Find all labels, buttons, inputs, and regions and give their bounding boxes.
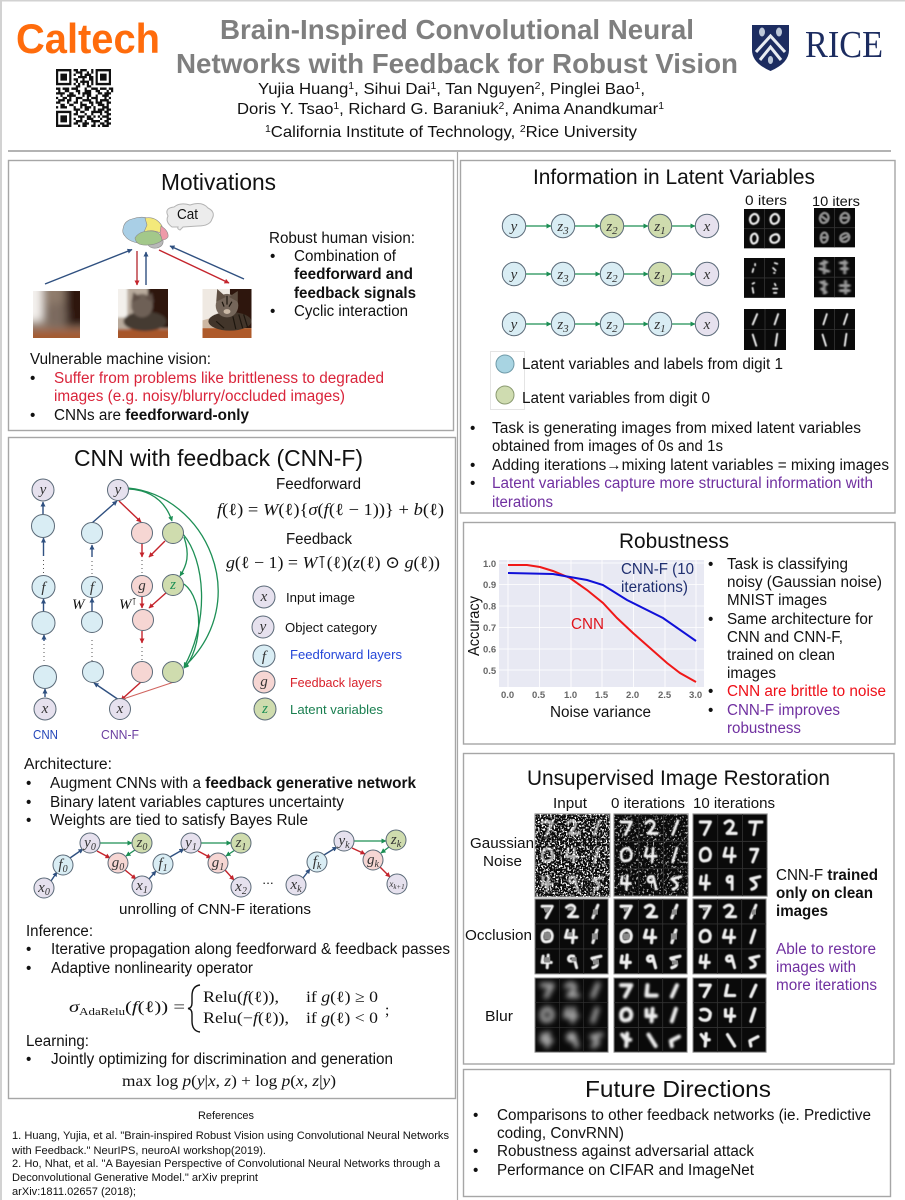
diagram: unrolling of CNN-F iterations: 1 bbox=[163, 863, 168, 874]
text: future work list: Comparisons to other feedback networks (ie. Predictive bbox=[497, 1107, 871, 1124]
line chart: accuracy vs noise variance: 0.7 bbox=[483, 623, 496, 634]
text: vulnerable machine vision: Vulnerable machine vision: bbox=[30, 351, 211, 368]
line chart: accuracy vs noise variance: Noise variance bbox=[550, 704, 651, 721]
equation: AdaRelu: Relu(− f(ℓ)), bbox=[203, 1010, 289, 1027]
references: 1. Huang, Yujia, et al. "Brain-inspired Robust Vision using Convolutional Neural Networks bbox=[12, 1130, 449, 1142]
references: arXiv:1811.02657 (2018); bbox=[12, 1186, 136, 1198]
text: robust human vision: • bbox=[270, 248, 275, 265]
row labels: Gaussian bbox=[470, 836, 534, 852]
row labels: Blur bbox=[485, 1009, 513, 1025]
line chart: accuracy vs noise variance bbox=[466, 559, 704, 721]
authors and affiliations: 1 bbox=[658, 101, 664, 112]
text: robustness findings: MNIST images bbox=[727, 592, 827, 609]
text: robust human vision: Cyclic interaction bbox=[294, 303, 408, 320]
text: architecture: Binary latent variables captures uncertainty bbox=[50, 794, 344, 811]
diagram: unrolling of CNN-F iterations: x bbox=[290, 877, 297, 893]
heading: information in latent variables: Information in Latent Variables bbox=[533, 164, 815, 189]
legend: node types: Feedback layers bbox=[290, 675, 382, 690]
text: vulnerable machine vision: • bbox=[30, 370, 35, 387]
text: able to restore images: Able to restore bbox=[776, 941, 876, 958]
equation: feedback bbox=[226, 531, 440, 572]
text: able to restore images: images with bbox=[776, 959, 856, 976]
diagram: latent variable chains: z bbox=[654, 317, 660, 333]
text: architecture: • bbox=[26, 812, 31, 829]
equation: AdaRelu: ; bbox=[385, 1002, 389, 1019]
image grid: gaussian noise row bbox=[535, 814, 767, 897]
references: Deconvolutional Generative Model." arXiv preprint bbox=[12, 1172, 258, 1184]
text: robust human vision: feedback signals bbox=[294, 285, 416, 302]
heading: motivations: Motivations bbox=[161, 169, 276, 195]
line chart: accuracy vs noise variance: 2.5 bbox=[658, 690, 672, 701]
diagram: latent variable chains: 3 bbox=[562, 273, 569, 285]
equation: AdaRelu: Relu( f(ℓ)), bbox=[203, 989, 279, 1006]
diagram: CNN-F: ⊺ bbox=[132, 597, 137, 608]
logo: Rice bbox=[752, 24, 883, 71]
logo: Rice: RICE bbox=[805, 24, 883, 66]
image grids: digits at 0 and 10 iterations bbox=[744, 192, 860, 350]
label: CNN: CNN bbox=[33, 727, 58, 742]
diagram: CNN-F: x bbox=[116, 701, 124, 717]
references bbox=[11, 1110, 449, 1198]
diagram: latent variable chains: z bbox=[654, 219, 660, 235]
diagram: unrolling of CNN-F iterations: k bbox=[397, 839, 402, 850]
diagram: unrolling of CNN-F iterations: k bbox=[375, 859, 380, 870]
text: vulnerable machine vision: images (e.g. noisy/blurry/occluded images) bbox=[54, 388, 345, 405]
diagram: CNN: y bbox=[38, 482, 47, 498]
diagram: unrolling of CNN-F iterations: 1 bbox=[192, 842, 197, 853]
equation: AdaRelu bbox=[69, 985, 389, 1032]
authors and affiliations: California Institute of Technology, bbox=[271, 124, 520, 141]
diagram: latent variable chains: 2 bbox=[612, 323, 618, 335]
authors and affiliations: Yujia Huang bbox=[258, 81, 344, 98]
text: learning: max log p(y|x, z) + log p(x, z|y) bbox=[122, 1073, 336, 1090]
legend: node types bbox=[252, 586, 402, 720]
row labels: Noise bbox=[483, 854, 522, 870]
logo: Caltech: Caltech bbox=[16, 15, 160, 62]
diagram: latent variable chains: z bbox=[557, 219, 563, 235]
authors and affiliations: 2 bbox=[535, 81, 541, 92]
text: architecture: Augment CNNs with a feedback generative network bbox=[50, 775, 416, 792]
diagram: CNN-F: y bbox=[113, 482, 122, 498]
text: robustness findings: trained on clean bbox=[727, 647, 835, 664]
text: trained only on clean images bbox=[776, 867, 878, 920]
line chart: accuracy vs noise variance: 1.0 bbox=[483, 559, 496, 570]
diagram: unrolling of CNN-F iterations: y bbox=[185, 835, 192, 851]
diagram: latent variable chains: z bbox=[654, 267, 660, 283]
text: future work list bbox=[473, 1107, 871, 1179]
text: architecture: Architecture: bbox=[24, 756, 112, 773]
QR code bbox=[56, 69, 113, 127]
diagram: unrolling of CNN-F iterations: k bbox=[297, 884, 302, 895]
text: latent variable findings: • bbox=[470, 420, 475, 437]
diagram: latent variable chains: z bbox=[606, 317, 612, 333]
diagram: CNN-F: g bbox=[138, 578, 146, 594]
text: vulnerable machine vision bbox=[30, 351, 384, 424]
equation: feedback: Feedback bbox=[286, 531, 352, 548]
row labels bbox=[465, 836, 534, 1025]
diagram: latent variable chains: 1 bbox=[660, 273, 666, 285]
text: learning: • bbox=[26, 1051, 31, 1068]
diagram: CNN-F: W bbox=[72, 597, 86, 613]
icon: thought cloud with Cat bbox=[167, 204, 213, 230]
text: robustness findings bbox=[708, 556, 886, 737]
image: heavily blurred cat bbox=[33, 291, 80, 338]
diagram: latent variable chains: y bbox=[509, 317, 518, 333]
legend: digit colours: Latent variables from digit 0 bbox=[522, 390, 710, 407]
diagram: unrolling of CNN-F iterations: z bbox=[236, 835, 241, 851]
diagram: unrolling of CNN-F iterations: 0 bbox=[91, 842, 96, 853]
column labels: 0 iterations bbox=[611, 796, 685, 812]
column labels: 10 iterations bbox=[693, 796, 775, 812]
diagram: unrolling of CNN-F iterations: k bbox=[345, 840, 350, 851]
line chart: accuracy vs noise variance: CNN bbox=[571, 616, 604, 633]
header bbox=[16, 14, 883, 141]
text: robust human vision: feedforward and bbox=[294, 266, 413, 283]
text: architecture: Weights are tied to satisfy Bayes Rule bbox=[50, 812, 308, 829]
equation: feedback: g(ℓ − 1) = W⊺(ℓ)(z(ℓ) ⊙ g(ℓ)) bbox=[226, 553, 440, 572]
equation: AdaRelu: σ bbox=[69, 999, 81, 1016]
image: sharp cat bbox=[202, 289, 252, 338]
curve: CNN bbox=[508, 565, 696, 682]
diagram: latent variable chains: x bbox=[703, 219, 711, 235]
text: robustness findings: • bbox=[708, 702, 713, 719]
text: learning: Jointly optimizing for discrimination and generation bbox=[51, 1051, 393, 1068]
text: learning: Learning: bbox=[26, 1033, 89, 1050]
diagram: unrolling of CNN-F iterations: f bbox=[313, 854, 317, 870]
line chart: accuracy vs noise variance: CNN-F (10 bbox=[621, 561, 694, 578]
curve: CNN-F bbox=[508, 573, 696, 641]
diagram: unrolling of CNN-F iterations: g bbox=[367, 852, 375, 868]
diagram: unrolling of CNN-F iterations: 0 bbox=[119, 862, 124, 873]
authors and affiliations: , Richard G. Baraniuk bbox=[339, 101, 500, 118]
text: inference: Adaptive nonlinearity operator bbox=[51, 960, 253, 977]
text: robustness findings: Same architecture for bbox=[727, 611, 873, 628]
heading: future directions: Future Directions bbox=[585, 1076, 771, 1102]
text: robust human vision: Combination of bbox=[294, 248, 397, 265]
line chart: accuracy vs noise variance: 1.5 bbox=[595, 690, 609, 701]
text: learning bbox=[26, 1033, 393, 1090]
text: inference: • bbox=[26, 941, 31, 958]
authors and affiliations: , Tan Nguyen bbox=[436, 81, 535, 98]
text: robustness findings: robustness bbox=[727, 720, 801, 737]
legend: digit colours bbox=[490, 352, 783, 410]
text: latent variable findings: • bbox=[470, 475, 475, 492]
text: latent variable findings: • bbox=[470, 457, 475, 474]
authors and affiliations: , Pinglei Bao bbox=[540, 81, 635, 98]
diagram: CNN-F: f bbox=[90, 580, 96, 596]
text: inference: • bbox=[26, 960, 31, 977]
diagram: CNN-F bbox=[72, 480, 218, 742]
equation: AdaRelu: AdaRelu bbox=[79, 1007, 125, 1018]
text: robustness findings: CNN-F improves bbox=[727, 702, 840, 719]
diagram: latent variable chains: y bbox=[509, 267, 518, 283]
diagram: unrolling of CNN-F iterations: f bbox=[58, 857, 63, 873]
diagram: unrolling of CNN-F iterations: ··· bbox=[262, 875, 274, 890]
title: Networks with Feedback for Robust Vision bbox=[176, 48, 738, 79]
title bbox=[176, 14, 738, 79]
line chart: accuracy vs noise variance: Accuracy bbox=[466, 596, 483, 656]
diagram: unrolling of CNN-F iterations: k bbox=[317, 861, 322, 872]
image grids: digits at 0 and 10 iterations: 0 iters bbox=[745, 192, 787, 208]
diagram: unrolling of CNN-F iterations: 1 bbox=[241, 842, 246, 853]
diagram: latent variable chains: 3 bbox=[562, 323, 569, 335]
text: future work list: Robustness against adversarial attack bbox=[497, 1143, 754, 1160]
diagram: latent variable chains: y bbox=[509, 219, 518, 235]
panel: CNN with feedback bbox=[8, 438, 456, 1098]
panel: unsupervised image restoration bbox=[464, 754, 894, 1064]
line chart: accuracy vs noise variance: 2.0 bbox=[626, 690, 639, 701]
line chart: accuracy vs noise variance: 0.6 bbox=[483, 644, 496, 656]
line chart: accuracy vs noise variance: 0.5 bbox=[483, 666, 497, 677]
references: 2. Ho, Nhat, et al. "A Bayesian Perspective of Convolutional Neural Networks through a bbox=[12, 1158, 441, 1170]
legend: node types: Feedforward layers bbox=[290, 647, 402, 662]
authors and affiliations: 2 bbox=[499, 101, 505, 112]
title: Brain-Inspired Convolutional Neural bbox=[220, 14, 694, 45]
authors and affiliations: 1 bbox=[348, 81, 355, 92]
text: vulnerable machine vision: • bbox=[30, 407, 35, 424]
text: inference: Iterative propagation along feedforward & feedback passes bbox=[51, 941, 450, 958]
references: with Feedback." NeurIPS, neuroAI workshop(2019). bbox=[11, 1145, 266, 1157]
diagram: unrolling of CNN-F iterations bbox=[34, 830, 407, 918]
authors and affiliations bbox=[237, 81, 664, 141]
diagram: unrolling of CNN-F iterations: 0 bbox=[63, 864, 68, 875]
diagram: CNN: x bbox=[41, 701, 49, 717]
equation: AdaRelu: ( bbox=[125, 999, 132, 1016]
text: robust human vision: Robust human vision: bbox=[269, 230, 415, 247]
line chart: accuracy vs noise variance: 0.0 bbox=[501, 690, 514, 701]
line chart: accuracy vs noise variance: 3.0 bbox=[689, 690, 702, 701]
diagram: CNN bbox=[32, 479, 58, 742]
legend: node types: g bbox=[260, 674, 268, 690]
icon: thought cloud with Cat: Cat bbox=[177, 207, 198, 223]
equation: feedforward: f(ℓ) = W(ℓ){σ(f(ℓ − 1))} + b(ℓ) bbox=[217, 500, 444, 519]
authors and affiliations: , Anima Anandkumar bbox=[504, 101, 659, 118]
diagram: latent variable chains bbox=[502, 214, 719, 336]
text: latent variable findings bbox=[470, 420, 889, 511]
text: latent variable findings: obtained from images of 0s and 1s bbox=[492, 438, 723, 455]
diagram: unrolling of CNN-F iterations: y bbox=[84, 835, 91, 851]
text: robustness findings: Task is classifying bbox=[727, 556, 848, 573]
diagram: unrolling of CNN-F iterations: unrolling of CNN-F iterations bbox=[119, 902, 311, 918]
equation: feedforward bbox=[217, 476, 444, 519]
diagram: latent variable chains: z bbox=[557, 267, 563, 283]
authors and affiliations: , Sihui Dai bbox=[354, 81, 430, 98]
authors and affiliations: 1 bbox=[430, 81, 437, 92]
text: trained only on clean images: only on clean bbox=[776, 885, 873, 902]
image grid: occlusion row bbox=[535, 899, 766, 974]
text: architecture: • bbox=[26, 775, 31, 792]
text: architecture: • bbox=[26, 794, 31, 811]
diagram: latent variable chains: 2 bbox=[612, 273, 618, 285]
text: robustness findings: images bbox=[727, 665, 776, 682]
authors and affiliations: 2 bbox=[520, 124, 526, 135]
panel: robustness bbox=[464, 522, 895, 744]
authors and affiliations: 1 bbox=[265, 124, 271, 135]
authors and affiliations: Doris Y. Tsao bbox=[237, 101, 330, 118]
text: future work list: coding, ConvRNN) bbox=[497, 1125, 624, 1142]
column labels bbox=[553, 796, 775, 812]
legend: node types: y bbox=[258, 619, 267, 635]
diagram: unrolling of CNN-F iterations: f bbox=[158, 856, 163, 872]
text: inference bbox=[26, 923, 450, 977]
image grids: digits at 0 and 10 iterations: 10 iters bbox=[812, 193, 860, 209]
legend: node types: Input image bbox=[286, 590, 355, 605]
heading: unsupervised image restoration: Unsupervised Image Restoration bbox=[527, 766, 830, 790]
diagram: unrolling of CNN-F iterations: x bbox=[389, 879, 393, 889]
text: robustness findings: • bbox=[708, 611, 713, 628]
diagram: latent variable chains: 1 bbox=[660, 323, 666, 335]
diagram: latent variable chains: x bbox=[703, 317, 711, 333]
text: able to restore images: more iterations bbox=[776, 977, 877, 994]
legend: node types: Object category bbox=[285, 620, 378, 635]
text: robustness findings: CNN and CNN-F, bbox=[727, 629, 843, 646]
text: robustness findings: • bbox=[708, 556, 713, 573]
diagram: unrolling of CNN-F iterations: x bbox=[235, 879, 242, 895]
legend: digit colours: Latent variables and labels from digit 1 bbox=[522, 356, 783, 373]
diagram: CNN-F: W bbox=[119, 597, 133, 613]
authors and affiliations: Rice University bbox=[526, 124, 637, 141]
panel: information in latent variables bbox=[460, 160, 895, 513]
diagram: unrolling of CNN-F iterations: k+1 bbox=[393, 883, 405, 891]
text: latent variable findings: Latent variables capture more structural information with bbox=[492, 475, 873, 492]
label: CNN-F: CNN-F bbox=[101, 727, 139, 742]
text: future work list: • bbox=[473, 1107, 478, 1124]
diagram: unrolling of CNN-F iterations: y bbox=[338, 833, 345, 849]
diagram: latent variable chains: 1 bbox=[660, 225, 666, 237]
diagram: unrolling of CNN-F iterations: 0 bbox=[142, 842, 147, 853]
line chart: accuracy vs noise variance: 0.5 bbox=[532, 690, 546, 701]
line chart: accuracy vs noise variance: 0.8 bbox=[483, 602, 496, 612]
authors and affiliations: 1 bbox=[333, 101, 340, 112]
panel: motivations bbox=[8, 160, 454, 430]
row labels: Occlusion bbox=[465, 928, 532, 944]
authors and affiliations: , bbox=[640, 81, 645, 98]
diagram: unrolling of CNN-F iterations: g bbox=[112, 855, 119, 871]
equation: AdaRelu: f(ℓ)) = bbox=[132, 999, 174, 1016]
diagram: unrolling of CNN-F iterations: 1 bbox=[143, 885, 148, 896]
diagram: unrolling of CNN-F iterations: 2 bbox=[242, 886, 247, 897]
text: able to restore images bbox=[776, 941, 877, 994]
text: robustness findings: noisy (Gaussian noise) bbox=[727, 574, 882, 591]
text: robustness findings: • bbox=[708, 683, 713, 700]
line chart: accuracy vs noise variance: 1.0 bbox=[564, 690, 577, 701]
icon: brain bbox=[123, 217, 168, 248]
diagram: unrolling of CNN-F iterations: z bbox=[391, 832, 397, 848]
equation: AdaRelu: if g(ℓ) ≥ 0 bbox=[306, 989, 378, 1006]
diagram: latent variable chains: z bbox=[606, 219, 612, 235]
diagram: unrolling of CNN-F iterations: x bbox=[38, 880, 45, 896]
text: latent variable findings: Task is generating images from mixed latent variables bbox=[492, 420, 861, 437]
legend: node types: f bbox=[262, 649, 268, 665]
text: architecture bbox=[24, 756, 416, 829]
text: future work list: • bbox=[473, 1162, 478, 1179]
text: trained only on clean images: images bbox=[776, 903, 828, 920]
panel: future directions bbox=[464, 1070, 890, 1196]
diagram: unrolling of CNN-F iterations: 1 bbox=[219, 862, 224, 873]
arrows: feedforward and feedback bbox=[45, 246, 244, 285]
line chart: accuracy vs noise variance: iterations) bbox=[621, 579, 688, 596]
heading: robustness: Robustness bbox=[619, 530, 729, 553]
diagram: latent variable chains: 3 bbox=[562, 225, 569, 237]
text: robust human vision: • bbox=[270, 303, 275, 320]
diagram: latent variable chains: z bbox=[557, 317, 563, 333]
legend: node types: Latent variables bbox=[290, 702, 384, 717]
text: robust human vision bbox=[269, 230, 416, 320]
text: robustness findings: CNN are brittle to noise bbox=[727, 683, 886, 700]
image grid: blur row bbox=[535, 978, 766, 1052]
text: inference: Inference: bbox=[26, 923, 93, 940]
image: blurred cat bbox=[118, 289, 168, 338]
text: trained only on clean images: CNN-F trained bbox=[776, 867, 878, 884]
equation: feedforward: Feedforward bbox=[276, 476, 361, 493]
diagram: CNN-F: z bbox=[169, 577, 176, 593]
text: future work list: • bbox=[473, 1143, 478, 1160]
diagram: unrolling of CNN-F iterations: z bbox=[137, 835, 142, 851]
diagram: unrolling of CNN-F iterations: 0 bbox=[45, 887, 50, 898]
text: vulnerable machine vision: CNNs are feedforward-only bbox=[54, 407, 249, 424]
text: latent variable findings: iterations bbox=[492, 494, 553, 511]
legend: node types: z bbox=[261, 701, 268, 717]
text: latent variable findings: Adding iterations→mixing latent variables = mixing images bbox=[492, 457, 889, 474]
diagram: latent variable chains: x bbox=[703, 267, 711, 283]
diagram: unrolling of CNN-F iterations: x bbox=[136, 878, 143, 894]
legend: node types: x bbox=[260, 589, 268, 605]
diagram: unrolling of CNN-F iterations: g bbox=[212, 855, 219, 871]
diagram: latent variable chains: 2 bbox=[612, 225, 618, 237]
text: future work list: Performance on CIFAR and ImageNet bbox=[497, 1162, 755, 1179]
heading: CNN with feedback: CNN with feedback (CNN-F) bbox=[74, 445, 363, 471]
references: References bbox=[198, 1110, 254, 1122]
authors and affiliations: 1 bbox=[635, 81, 641, 92]
equation: AdaRelu: if g(ℓ) < 0 bbox=[306, 1010, 378, 1027]
text: vulnerable machine vision: Suffer from problems like brittleness to degraded bbox=[54, 370, 384, 387]
column labels: Input bbox=[553, 796, 587, 812]
diagram: CNN: f bbox=[41, 580, 47, 596]
diagram: latent variable chains: z bbox=[606, 267, 612, 283]
line chart: accuracy vs noise variance: 0.9 bbox=[483, 580, 496, 591]
